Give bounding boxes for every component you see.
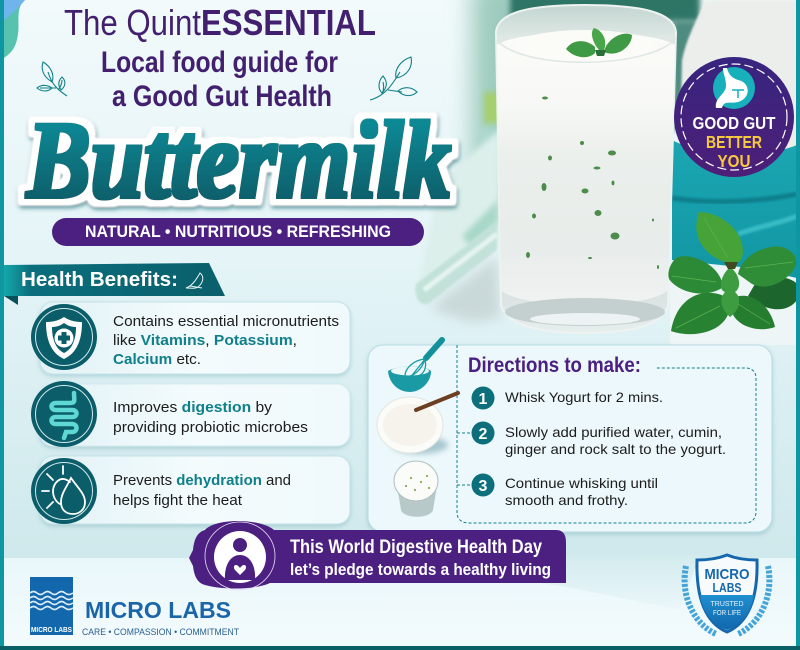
heading band: Health Benefits: Health Benefits: xyxy=(21,269,178,291)
step 1: 1 xyxy=(479,391,488,408)
tagline pill: NATURAL • NUTRITIOUS • REFRESHING xyxy=(85,223,391,241)
panel: benefit 3: helps fight the heat xyxy=(113,492,243,509)
badge: good gut better you: BETTER xyxy=(706,132,762,152)
panel: benefit 2: providing probiotic microbes xyxy=(113,419,308,436)
badge: micro labs trusted for life: TRUSTED xyxy=(710,601,744,608)
icon: leaf sprig left xyxy=(37,62,67,96)
badge: micro labs trusted for life: FOR LIFE xyxy=(713,610,741,617)
icon: whisk in bowl xyxy=(388,340,442,392)
callout: world digestive health day: let’s pledge towards a healthy living xyxy=(290,560,551,579)
badge: good gut better you: YOU xyxy=(718,151,750,171)
badge: micro labs trusted for life: MICRO xyxy=(704,566,750,583)
panel: benefit 1: Contains essential micronutrients xyxy=(113,313,339,330)
badge: good gut better you: GOOD GUT xyxy=(692,113,776,133)
mint on top of glass xyxy=(566,28,632,57)
icon: intestines xyxy=(31,381,97,447)
panel: benefit 1: Calcium etc. xyxy=(113,351,201,368)
badge: micro labs trusted for life: LABS xyxy=(712,581,742,595)
specks xyxy=(526,96,659,269)
icon: small leaf xyxy=(186,273,203,288)
icon: person with heart xyxy=(214,531,266,583)
icon: stomach xyxy=(713,67,755,109)
panel: benefit 2 xyxy=(31,381,350,447)
callout: world digestive health day: This World Digestive Health Day xyxy=(290,537,542,558)
step 2 xyxy=(472,422,726,457)
logo: micro labs: MICRO LABS xyxy=(85,597,231,623)
logo: micro labs: CARE • COMPASSION • COMMITMENT xyxy=(82,627,239,637)
mint bunch xyxy=(668,212,797,334)
step 3: Continue whisking until xyxy=(505,475,658,491)
badge: micro labs trusted for life xyxy=(685,555,769,634)
towel left xyxy=(416,130,500,322)
logo: micro labs xyxy=(30,577,239,637)
photo: glass of buttermilk with mint xyxy=(416,0,800,348)
heading band: Health Benefits xyxy=(4,263,225,305)
panel: benefit 1: like Vitamins, Potassium, xyxy=(113,332,297,349)
bottom border xyxy=(0,646,800,650)
step 2: 2 xyxy=(479,426,488,443)
table xyxy=(670,268,800,348)
title: a Good Gut Health xyxy=(112,80,332,113)
panel: benefit 2: Improves digestion by xyxy=(113,399,273,416)
step 1: Whisk Yogurt for 2 mins. xyxy=(505,389,663,405)
dashed step frame xyxy=(457,345,756,523)
panel: directions xyxy=(368,340,772,532)
step 3 xyxy=(472,474,658,508)
heading: Buttermilk: Buttermilk xyxy=(25,99,451,221)
step 2: Slowly add purified water, cumin, xyxy=(505,424,722,440)
title: The QuintESSENTIAL xyxy=(64,2,376,43)
panel: benefit 1 xyxy=(31,302,350,374)
icon: shield with cross xyxy=(31,304,97,370)
icon: leaf sprig right xyxy=(370,57,417,100)
logo mark: MICRO LABS xyxy=(31,627,72,634)
icon: small glass xyxy=(394,461,438,517)
icon: sun and water drop xyxy=(31,458,97,524)
panel: directions: Directions to make: xyxy=(468,354,641,377)
step 3: 3 xyxy=(479,478,488,495)
drinking glass xyxy=(496,5,676,333)
photo backdrop xyxy=(472,0,702,220)
title: Local food guide for xyxy=(101,46,338,79)
step 3: smooth and frothy. xyxy=(505,492,628,508)
panel: benefit 3 xyxy=(31,456,350,524)
pitcher xyxy=(680,0,797,150)
title xyxy=(64,2,376,113)
step 1 xyxy=(472,386,663,410)
footer shaded wedge xyxy=(540,555,700,610)
step 2: ginger and rock salt to the yogurt. xyxy=(505,441,726,457)
callout: world digestive health day xyxy=(189,521,566,590)
icon: yogurt bowl with spoon xyxy=(377,393,458,454)
logo mark xyxy=(30,577,73,635)
tagline pill xyxy=(52,218,424,246)
top-left corner blob xyxy=(4,0,25,58)
teal cloth xyxy=(672,140,797,278)
panel: benefit 3: Prevents dehydration and xyxy=(113,472,291,489)
footer background xyxy=(0,558,800,650)
badge: good gut better you xyxy=(674,57,794,177)
